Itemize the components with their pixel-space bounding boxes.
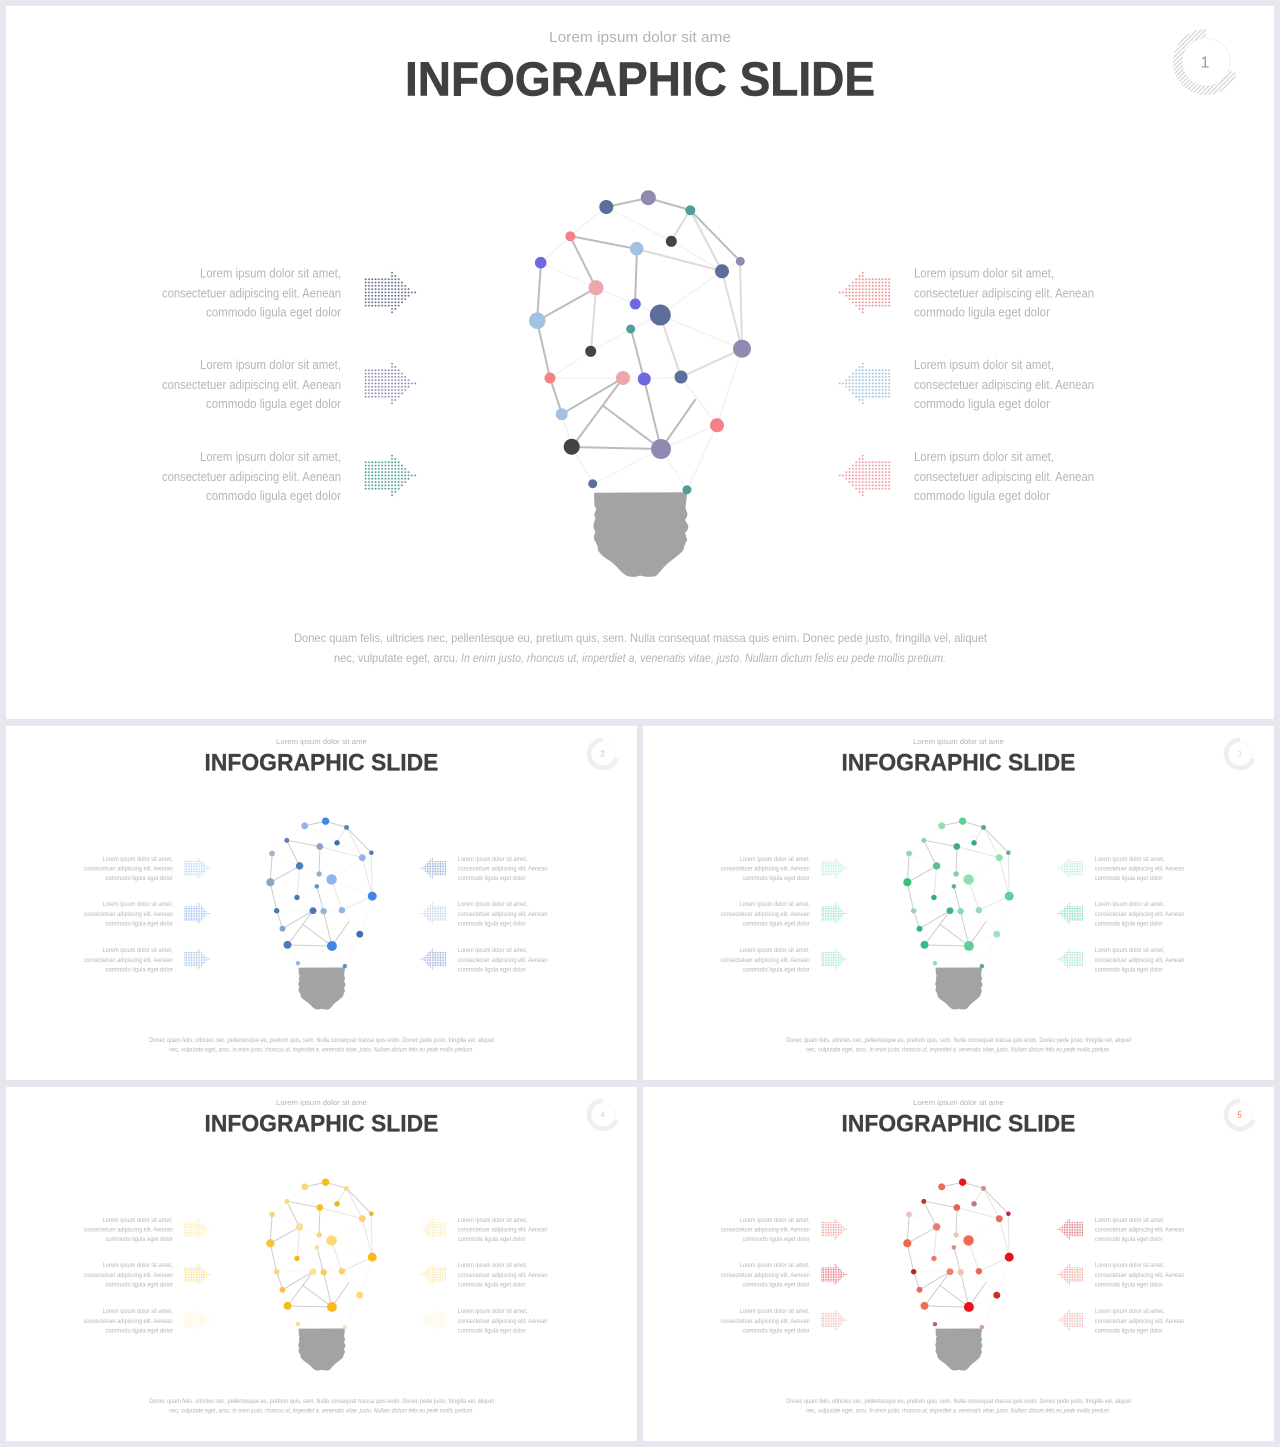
right text blocks: commodo ligula eget dolor (1095, 1236, 1162, 1243)
left text blocks: Lorem ipsum dolor sit amet, (103, 1308, 173, 1315)
left text blocks: commodo ligula eget dolor (743, 921, 810, 928)
right text blocks: consectetuer adipiscing elit. Aenean (458, 1318, 548, 1325)
footer paragraph (786, 1038, 1131, 1054)
left text blocks: commodo ligula eget dolor (106, 1282, 173, 1289)
right text blocks: commodo ligula eget dolor (914, 306, 1050, 320)
right text blocks: consectetuer adipiscing elit. Aenean (1095, 1318, 1185, 1325)
left text blocks: consectetuer adipiscing elit. Aenean (84, 911, 173, 918)
right text blocks: Lorem ipsum dolor sit amet, (1095, 1262, 1165, 1269)
right text blocks: Lorem ipsum dolor sit amet, (1095, 1217, 1165, 1224)
left text blocks: commodo ligula eget dolor (106, 966, 173, 973)
page badge: 1 (1201, 54, 1210, 72)
right dotted arrows (838, 271, 891, 497)
right text blocks: consectetuer adipiscing elit. Aenean (1095, 911, 1185, 918)
left text blocks: consectetuer adipiscing elit. Aenean (84, 866, 173, 873)
icon: network light bulb (266, 817, 377, 1009)
left text blocks: commodo ligula eget dolor (743, 1282, 810, 1289)
footer paragraph (149, 1399, 494, 1415)
footer paragraph: In enim justo, rhoncus ut, imperdiet a, venenatis vitae, justo. Nullam dictum felis eu pede mollis pretium. (869, 1409, 1111, 1415)
page badge (1226, 740, 1253, 768)
left text blocks: consectetuer adipiscing elit. Aenean (84, 1272, 173, 1279)
subtitle: Lorem ipsum dolor sit ame (549, 29, 731, 46)
left dotted arrows (821, 858, 848, 970)
right text blocks (914, 266, 1094, 503)
right text blocks: Lorem ipsum dolor sit amet, (1095, 901, 1165, 908)
left text blocks: Lorem ipsum dolor sit amet, (103, 901, 173, 908)
left text blocks: consectetuer adipiscing elit. Aenean (721, 866, 810, 873)
right text blocks: Lorem ipsum dolor sit amet, (458, 1217, 528, 1224)
left text blocks: consectetuer adipiscing elit. Aenean (721, 911, 810, 918)
left text blocks: consectetuer adipiscing elit. Aenean (162, 470, 341, 484)
footer paragraph: nec, vulputate eget, arcu. (806, 1048, 868, 1054)
left text blocks: Lorem ipsum dolor sit amet, (200, 358, 341, 372)
footer paragraph: Donec quam felis, ultricies nec, pellentesque eu, pretium quis, sem. Nulla consequat massa quis enim. Donec pede justo, fringilla vel, aliquet (149, 1038, 494, 1044)
subtitle: Lorem ipsum dolor sit ame (913, 737, 1004, 746)
title: INFOGRAPHIC SLIDE (842, 749, 1075, 776)
right text blocks: commodo ligula eget dolor (914, 489, 1050, 503)
right text blocks: commodo ligula eget dolor (458, 1236, 525, 1243)
left text blocks: consectetuer adipiscing elit. Aenean (84, 1318, 173, 1325)
right text blocks: consectetuer adipiscing elit. Aenean (1095, 1227, 1185, 1234)
left text blocks: commodo ligula eget dolor (743, 1236, 810, 1243)
left text blocks: Lorem ipsum dolor sit amet, (103, 1262, 173, 1269)
right text blocks: commodo ligula eget dolor (458, 966, 525, 973)
footer paragraph: Donec quam felis, ultricies nec, pellentesque eu, pretium quis, sem. Nulla consequat massa quis enim. Donec pede justo, fringilla vel, aliquet (786, 1038, 1131, 1044)
left text blocks: Lorem ipsum dolor sit amet, (103, 1217, 173, 1224)
left text blocks: consectetuer adipiscing elit. Aenean (721, 957, 810, 964)
page badge: 2 (600, 750, 605, 759)
right text blocks: Lorem ipsum dolor sit amet, (914, 266, 1054, 280)
right text blocks: commodo ligula eget dolor (1095, 966, 1162, 973)
left text blocks: commodo ligula eget dolor (106, 921, 173, 928)
left text blocks: commodo ligula eget dolor (743, 966, 810, 973)
right text blocks: commodo ligula eget dolor (458, 1327, 525, 1334)
right text blocks: consectetuer adipiscing elit. Aenean (914, 378, 1094, 392)
right text blocks: Lorem ipsum dolor sit amet, (1095, 1308, 1165, 1315)
footer paragraph (786, 1399, 1131, 1415)
left text blocks: consectetuer adipiscing elit. Aenean (162, 286, 341, 300)
left text blocks: consectetuer adipiscing elit. Aenean (84, 1227, 173, 1234)
slide 2: blue panel (6, 726, 637, 1080)
left text blocks: Lorem ipsum dolor sit amet, (740, 901, 810, 908)
left text blocks: Lorem ipsum dolor sit amet, (740, 1308, 810, 1315)
left text blocks: Lorem ipsum dolor sit amet, (200, 450, 341, 464)
left text blocks: commodo ligula eget dolor (743, 1327, 810, 1334)
right text blocks: Lorem ipsum dolor sit amet, (458, 901, 528, 908)
left text blocks: commodo ligula eget dolor (206, 306, 341, 320)
slide 4: yellow panel (6, 1087, 637, 1441)
right text blocks: Lorem ipsum dolor sit amet, (914, 450, 1054, 464)
footer paragraph: In enim justo, rhoncus ut, imperdiet a, venenatis vitae, justo. Nullam dictum felis eu pede mollis pretium. (461, 651, 946, 665)
right dotted arrows (420, 858, 446, 970)
right text blocks: consectetuer adipiscing elit. Aenean (458, 957, 548, 964)
title: INFOGRAPHIC SLIDE (842, 1110, 1075, 1137)
right text blocks: consectetuer adipiscing elit. Aenean (1095, 1272, 1185, 1279)
subtitle: Lorem ipsum dolor sit ame (276, 737, 367, 746)
right text blocks: commodo ligula eget dolor (914, 397, 1050, 411)
right text blocks: Lorem ipsum dolor sit amet, (458, 856, 528, 863)
icon: network light bulb (903, 1178, 1014, 1370)
right text blocks: commodo ligula eget dolor (458, 1282, 525, 1289)
right text blocks: consectetuer adipiscing elit. Aenean (1095, 957, 1185, 964)
left text blocks (721, 1217, 810, 1334)
slide 1: main panel (6, 6, 1274, 719)
slide 3: green panel (643, 726, 1274, 1080)
right text blocks (1095, 1217, 1185, 1334)
footer paragraph: In enim justo, rhoncus ut, imperdiet a, venenatis vitae, justo. Nullam dictum felis eu pede mollis pretium. (869, 1048, 1111, 1054)
left text blocks: commodo ligula eget dolor (106, 875, 173, 882)
right text blocks: commodo ligula eget dolor (458, 921, 525, 928)
right text blocks: Lorem ipsum dolor sit amet, (458, 947, 528, 954)
left text blocks: consectetuer adipiscing elit. Aenean (721, 1272, 810, 1279)
right text blocks: Lorem ipsum dolor sit amet, (914, 358, 1054, 372)
title: INFOGRAPHIC SLIDE (205, 1110, 438, 1137)
left text blocks: commodo ligula eget dolor (106, 1327, 173, 1334)
right dotted arrows (1057, 858, 1083, 970)
footer paragraph: Donec quam felis, ultricies nec, pellentesque eu, pretium quis, sem. Nulla consequat massa quis enim. Donec pede justo, fringilla vel, aliquet (149, 1399, 494, 1405)
left text blocks: commodo ligula eget dolor (743, 875, 810, 882)
left dotted arrows (184, 858, 211, 970)
left dotted arrows (364, 271, 417, 497)
right text blocks: Lorem ipsum dolor sit amet, (458, 1262, 528, 1269)
page badge (1226, 1101, 1253, 1129)
page badge (589, 1101, 616, 1129)
subtitle: Lorem ipsum dolor sit ame (276, 1098, 367, 1107)
right text blocks: consectetuer adipiscing elit. Aenean (1095, 866, 1185, 873)
title: INFOGRAPHIC SLIDE (405, 54, 875, 106)
left text blocks: Lorem ipsum dolor sit amet, (740, 1262, 810, 1269)
right dotted arrows (1057, 1219, 1083, 1331)
left text blocks: consectetuer adipiscing elit. Aenean (162, 378, 341, 392)
page badge (1178, 34, 1233, 91)
right text blocks: commodo ligula eget dolor (1095, 921, 1162, 928)
right text blocks: commodo ligula eget dolor (1095, 1327, 1162, 1334)
left text blocks (84, 1217, 173, 1334)
footer paragraph: nec, vulputate eget, arcu. (334, 651, 458, 665)
right text blocks (458, 1217, 548, 1334)
footer paragraph: nec, vulputate eget, arcu. (169, 1048, 231, 1054)
icon: network light bulb (266, 1178, 377, 1370)
page badge: 4 (600, 1111, 605, 1120)
left text blocks: Lorem ipsum dolor sit amet, (740, 947, 810, 954)
footer paragraph: In enim justo, rhoncus ut, imperdiet a, venenatis vitae, justo. Nullam dictum felis eu pede mollis pretium. (232, 1409, 474, 1415)
left text blocks: Lorem ipsum dolor sit amet, (740, 856, 810, 863)
left text blocks (162, 266, 341, 503)
right dotted arrows (420, 1219, 446, 1331)
footer paragraph (294, 631, 988, 665)
left dotted arrows (821, 1219, 848, 1331)
right text blocks: consectetuer adipiscing elit. Aenean (458, 866, 548, 873)
left text blocks: commodo ligula eget dolor (106, 1236, 173, 1243)
left text blocks: Lorem ipsum dolor sit amet, (103, 947, 173, 954)
left text blocks (721, 856, 810, 973)
right text blocks: commodo ligula eget dolor (458, 875, 525, 882)
footer paragraph: Donec quam felis, ultricies nec, pellentesque eu, pretium quis, sem. Nulla consequat massa quis enim. Donec pede justo, fringilla vel, aliquet (786, 1399, 1131, 1405)
right text blocks: Lorem ipsum dolor sit amet, (1095, 947, 1165, 954)
subtitle: Lorem ipsum dolor sit ame (913, 1098, 1004, 1107)
footer paragraph: In enim justo, rhoncus ut, imperdiet a, venenatis vitae, justo. Nullam dictum felis eu pede mollis pretium. (232, 1048, 474, 1054)
page badge: 3 (1237, 750, 1242, 759)
left text blocks: Lorem ipsum dolor sit amet, (103, 856, 173, 863)
left text blocks: Lorem ipsum dolor sit amet, (740, 1217, 810, 1224)
right text blocks: Lorem ipsum dolor sit amet, (1095, 856, 1165, 863)
left text blocks: consectetuer adipiscing elit. Aenean (84, 957, 173, 964)
right text blocks: commodo ligula eget dolor (1095, 1282, 1162, 1289)
left text blocks: consectetuer adipiscing elit. Aenean (721, 1318, 810, 1325)
right text blocks: consectetuer adipiscing elit. Aenean (914, 470, 1094, 484)
left text blocks: consectetuer adipiscing elit. Aenean (721, 1227, 810, 1234)
right text blocks (1095, 856, 1185, 973)
page badge: 5 (1237, 1111, 1242, 1120)
left dotted arrows (184, 1219, 211, 1331)
left text blocks: Lorem ipsum dolor sit amet, (200, 266, 341, 280)
right text blocks: consectetuer adipiscing elit. Aenean (458, 911, 548, 918)
right text blocks: consectetuer adipiscing elit. Aenean (458, 1227, 548, 1234)
footer paragraph: nec, vulputate eget, arcu. (169, 1409, 231, 1415)
footer paragraph: nec, vulputate eget, arcu. (806, 1409, 868, 1415)
left text blocks: commodo ligula eget dolor (206, 489, 341, 503)
page badge (589, 740, 616, 768)
right text blocks: commodo ligula eget dolor (1095, 875, 1162, 882)
icon: network light bulb (529, 190, 751, 577)
title: INFOGRAPHIC SLIDE (205, 749, 438, 776)
footer paragraph: Donec quam felis, ultricies nec, pellentesque eu, pretium quis, sem. Nulla consequat massa quis enim. Donec pede justo, fringilla vel, aliquet (294, 631, 988, 645)
icon: network light bulb (903, 817, 1014, 1009)
left text blocks: commodo ligula eget dolor (206, 397, 341, 411)
slide 5: red panel (643, 1087, 1274, 1441)
right text blocks: consectetuer adipiscing elit. Aenean (458, 1272, 548, 1279)
right text blocks (458, 856, 548, 973)
right text blocks: Lorem ipsum dolor sit amet, (458, 1308, 528, 1315)
footer paragraph (149, 1038, 494, 1054)
left text blocks (84, 856, 173, 973)
right text blocks: consectetuer adipiscing elit. Aenean (914, 286, 1094, 300)
